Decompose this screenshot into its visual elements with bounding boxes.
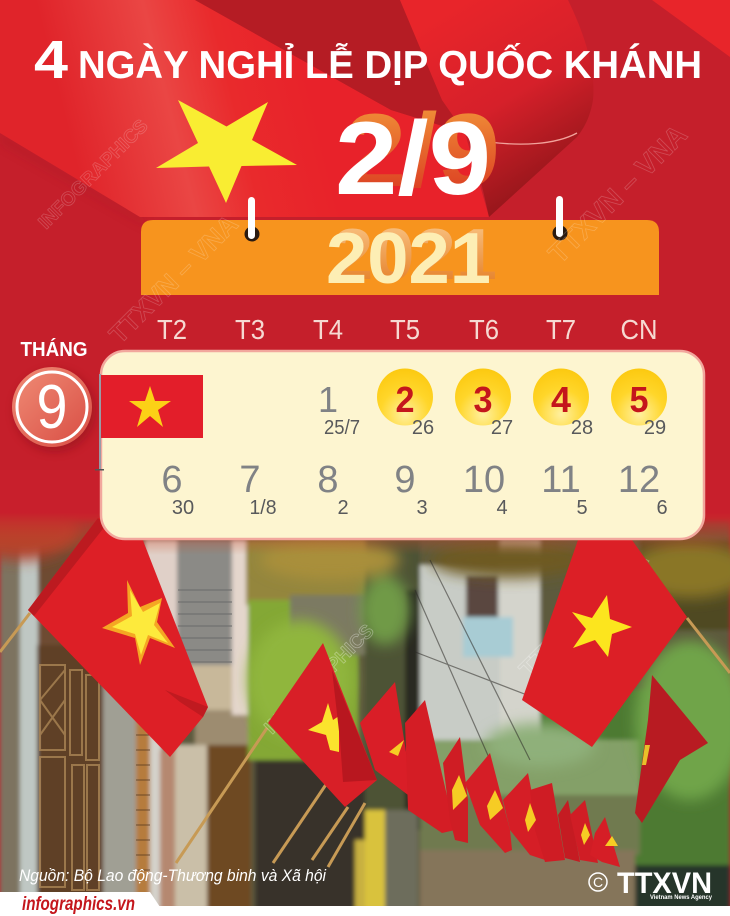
second week lunar dates: 5 [576,497,588,519]
TTXVN logo: TTXVN [617,867,712,900]
first week lunar dates [324,417,666,439]
title [34,30,702,90]
flag: large right [522,540,687,747]
second week dates: 8 [317,459,339,501]
first week dates: 5 [630,379,648,420]
ribbon: left band [0,0,489,217]
ring holes and rings [244,196,568,242]
weekday headers: T5 [390,314,420,345]
date 2/9: 2/9 [344,93,500,209]
photo backdrop [0,520,730,910]
watermarks [35,116,693,739]
flag poles [0,613,730,867]
second week lunar dates: 4 [496,497,508,519]
watermarks: TTXVN – VNA [513,543,654,684]
second week lunar dates: 30 [172,497,194,519]
weekday headers: T3 [235,314,265,345]
watermarks: INFOGRAPHICS [261,621,379,739]
first week dates: 2 [396,379,414,420]
ribbon: middle curl [400,0,593,217]
first week dates: 3 [474,379,492,420]
first week lunar dates: 27 [491,417,513,439]
second week dates: 11 [541,459,581,501]
second week lunar dates: 2 [337,497,349,519]
fade from red to photo [0,470,730,555]
copyright symbol: C [593,874,603,890]
weekday headers: T4 [313,314,343,345]
second week dates [161,459,660,501]
foliage patches [0,500,730,800]
yellow star [156,100,297,203]
flag: large left [28,518,208,757]
holiday circles [377,368,667,426]
flag: far right, in foliage [635,675,708,823]
first week dates: 1 [318,379,338,420]
month label: THÁNG [20,338,88,361]
second week lunar dates: 1/8 [250,497,276,519]
small flag [95,374,203,470]
calendar panel [101,351,704,539]
watermarks: TTXVN – VNA [542,119,693,269]
second week dates: 10 [463,459,505,501]
first week dates: 4 [551,379,571,420]
first week lunar dates: 28 [571,417,593,439]
weekday headers: T6 [469,314,499,345]
ribbon: highlight line [489,133,577,144]
year 2021: 2021 [332,215,497,295]
photo: street with flags [0,500,730,910]
white footer strip [0,906,730,916]
title: 4 [34,30,68,90]
month badge [12,367,95,451]
louver lines [178,590,232,662]
copyright symbol [589,873,607,891]
first week dates [318,379,648,420]
watermarks: INFOGRAPHICS [35,116,153,234]
brick lines [136,735,150,870]
wires [410,560,540,760]
second week dates: 12 [618,459,660,501]
ribbon: lower shadow [0,133,150,228]
row flag stars [389,740,618,846]
flags: receding row [360,682,620,867]
weekday headers: CN [620,314,658,345]
weekday headers: T7 [546,314,576,345]
second week dates: 9 [394,459,416,501]
year banner [141,196,659,299]
weekday headers: T2 [157,314,187,345]
second week lunar dates: 6 [656,497,668,519]
second week dates: 6 [161,459,183,501]
weekday headers [157,314,658,345]
first week lunar dates: 29 [644,417,666,439]
first week lunar dates: 25/7 [324,417,360,439]
website tag: infographics.vn [22,894,135,915]
second week lunar dates: 3 [416,497,428,519]
ribbon: dark fold behind [195,0,465,133]
second week dates: 7 [239,459,261,501]
date 2/9: 2/9 [335,101,491,217]
first week lunar dates: 26 [412,417,434,439]
TTXVN logo: Vietnam News Agency [650,894,712,901]
title: NGÀY NGHỈ LỄ DỊP QUỐC KHÁNH [78,42,702,87]
watermarks: TTXVN – VNA [103,208,244,349]
year 2021: 2021 [326,219,491,299]
flag: centre-left [268,643,377,807]
second week lunar dates [172,497,668,519]
door lattice [40,665,99,890]
source note: Nguồn: Bộ Lao động-Thương binh và Xã hội [19,866,327,885]
ribbon: top right corner [652,0,730,57]
month badge: 9 [36,373,68,442]
